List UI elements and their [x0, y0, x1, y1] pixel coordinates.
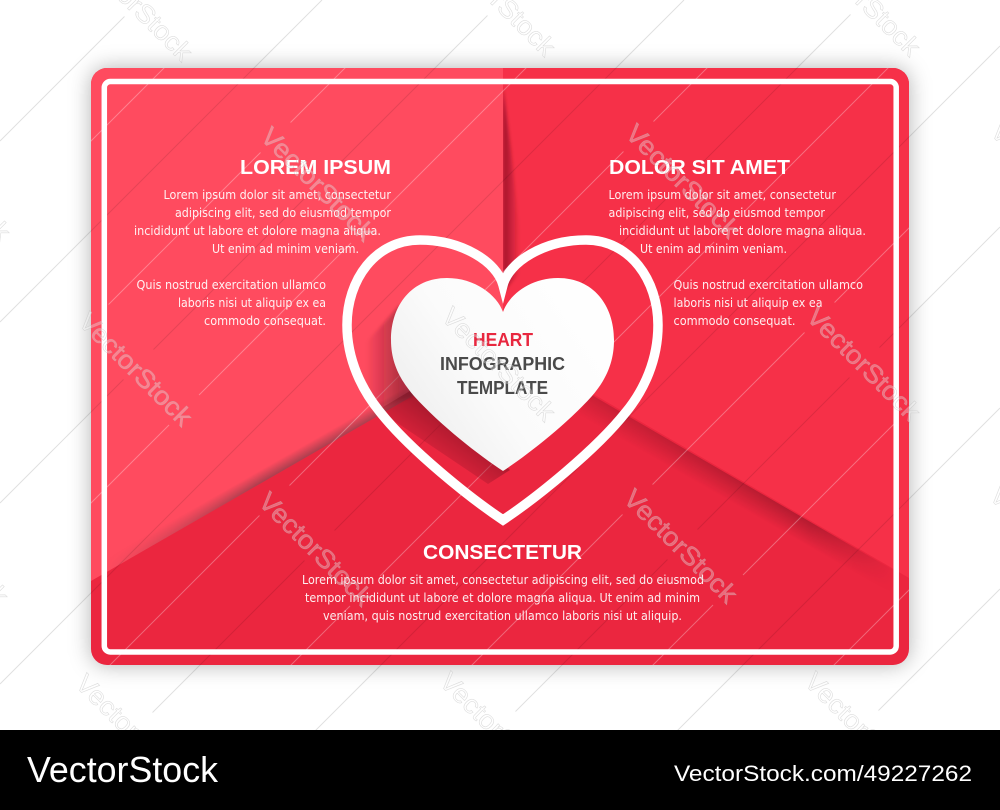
watermark text: VectorStock: [253, 486, 379, 613]
heading: dolor sit amet: DOLOR SIT AMET: [609, 157, 790, 179]
text block: left top: Ut enim ad minim veniam.: [212, 242, 359, 256]
heart title: INFOGRAPHIC: INFOGRAPHIC: [440, 354, 565, 374]
seam shadow: [503, 86, 519, 292]
heading: lorem ipsum: LOREM IPSUM: [240, 157, 391, 179]
left fold shadow: [120, 389, 414, 564]
text block: right bottom: Quis nostrud exercitation ullamco: [674, 278, 863, 292]
text block: right top: Ut enim ad minim veniam.: [640, 242, 787, 256]
watermark text: VectorStock: [618, 483, 744, 610]
inner white heart: [391, 278, 614, 471]
text block: left top: incididunt ut labore et dolore magna aliqua.: [134, 224, 381, 238]
footer bar: [0, 730, 1000, 810]
panel: bottom: [91, 68, 909, 665]
heading: consectetur: CONSECTETUR: [423, 542, 583, 564]
text block: left bottom: Quis nostrud exercitation ullamco: [136, 278, 326, 292]
panel: left: [91, 68, 503, 581]
text block: right top: [608, 188, 866, 256]
infographic card: [91, 68, 909, 665]
text block: left top: adipiscing elit, sed do eiusmod tempor: [175, 206, 391, 220]
text block: right top: incididunt ut labore et dolore magna aliqua.: [619, 224, 866, 238]
text block: right bottom: laboris nisi ut aliquip ex ea: [674, 296, 822, 310]
card shadow: [91, 68, 909, 665]
heart shadow: [364, 305, 510, 484]
right fold shadow: [582, 396, 882, 568]
panel: right: [503, 68, 909, 578]
watermark text: VectorStock: [70, 668, 196, 795]
card lines light: [91, 68, 909, 665]
footer logo text: VectorStock: [27, 749, 219, 790]
card lines dark: [91, 68, 909, 665]
watermark text: VectorStock: [799, 666, 925, 793]
text block: right bottom: commodo consequat.: [674, 314, 796, 328]
outer heart outline: [347, 240, 658, 520]
text block: left bottom: commodo consequat.: [204, 314, 326, 328]
text block: bottom: [302, 573, 704, 623]
watermark text: VectorStock: [434, 666, 560, 793]
text block: left top: [134, 188, 391, 256]
text block: left top: Lorem ipsum dolor sit amet, consectetur: [164, 188, 391, 202]
watermark text: VectorStock: [801, 301, 927, 428]
text block: left bottom: laboris nisi ut aliquip ex ea: [178, 296, 326, 310]
text block: bottom: tempor incididunt ut labore et dolore magna aliqua. Ut enim ad minim: [305, 591, 700, 605]
watermark text: VectorStock: [255, 121, 381, 248]
text block: left bottom: [136, 278, 326, 328]
heart title: [440, 330, 565, 398]
footer image id: VectorStock.com/49227262: [674, 761, 972, 786]
text block: right bottom: [674, 278, 863, 328]
watermark text: VectorStock: [620, 118, 746, 245]
text block: bottom: veniam, quis nostrud exercitation ullamco laboris nisi ut aliquip.: [323, 609, 682, 623]
heart title: HEART: HEART: [473, 330, 533, 350]
text block: bottom: Lorem ipsum dolor sit amet, consectetur adipiscing elit, sed do eiusmod: [302, 573, 704, 587]
text block: right top: Lorem ipsum dolor sit amet, consectetur: [608, 188, 836, 202]
watermark text: VectorStock: [436, 301, 562, 428]
text block: right top: adipiscing elit, sed do eiusmod tempor: [608, 206, 825, 220]
watermark text: VectorStock: [73, 306, 199, 433]
white frame: [104, 82, 896, 652]
heart title: TEMPLATE: TEMPLATE: [457, 378, 548, 398]
